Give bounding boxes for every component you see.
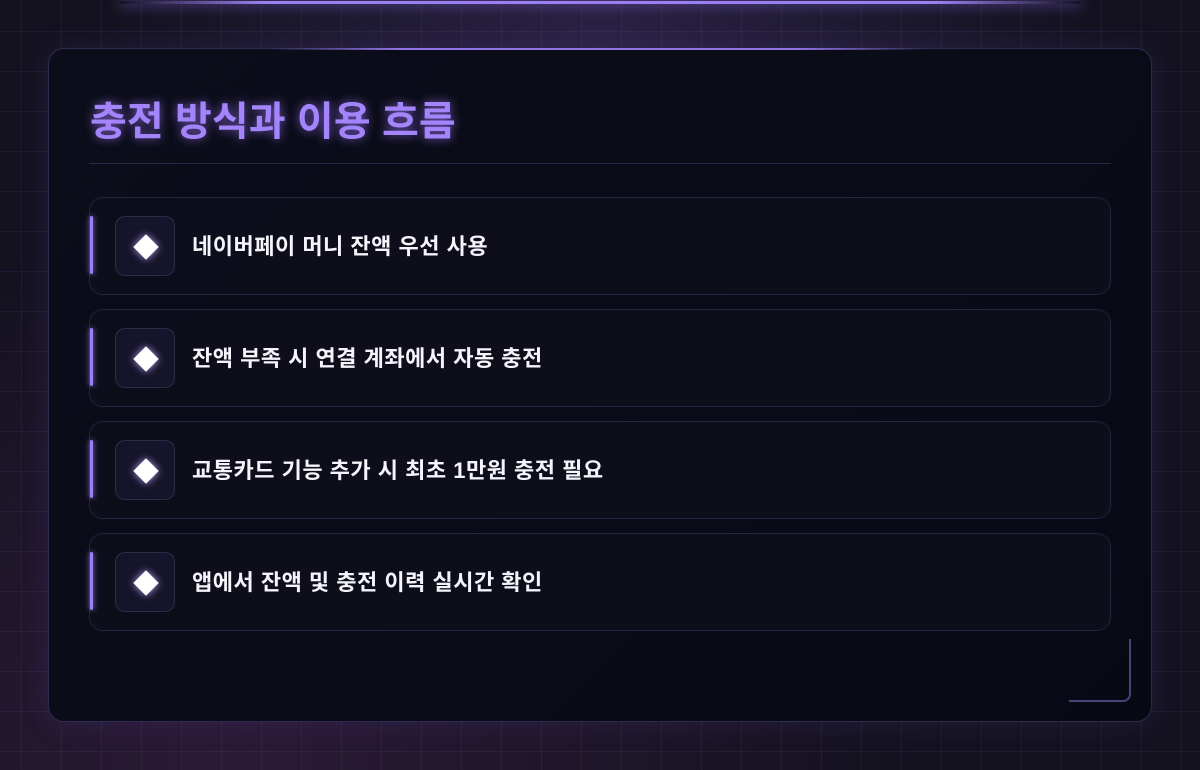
corner bracket [1069, 639, 1131, 702]
text 4: 앱에서 잔액 및 충전 이력 실시간 확인 [192, 570, 543, 595]
text 1: 네이버페이 머니 잔액 우선 사용 [192, 234, 488, 259]
icon: diamond [115, 552, 175, 612]
icon: diamond [115, 440, 175, 500]
title: 충전 방식과 이용 흐름 [90, 100, 456, 144]
row 2 [89, 309, 1111, 407]
row 3 [89, 421, 1111, 519]
icon: diamond [115, 328, 175, 388]
row 1 [89, 197, 1111, 295]
text 3: 교통카드 기능 추가 시 최초 1만원 충전 필요 [192, 458, 604, 483]
row 4 [89, 533, 1111, 631]
text 2: 잔액 부족 시 연결 계좌에서 자동 충전 [192, 346, 543, 371]
icon: diamond [115, 216, 175, 276]
